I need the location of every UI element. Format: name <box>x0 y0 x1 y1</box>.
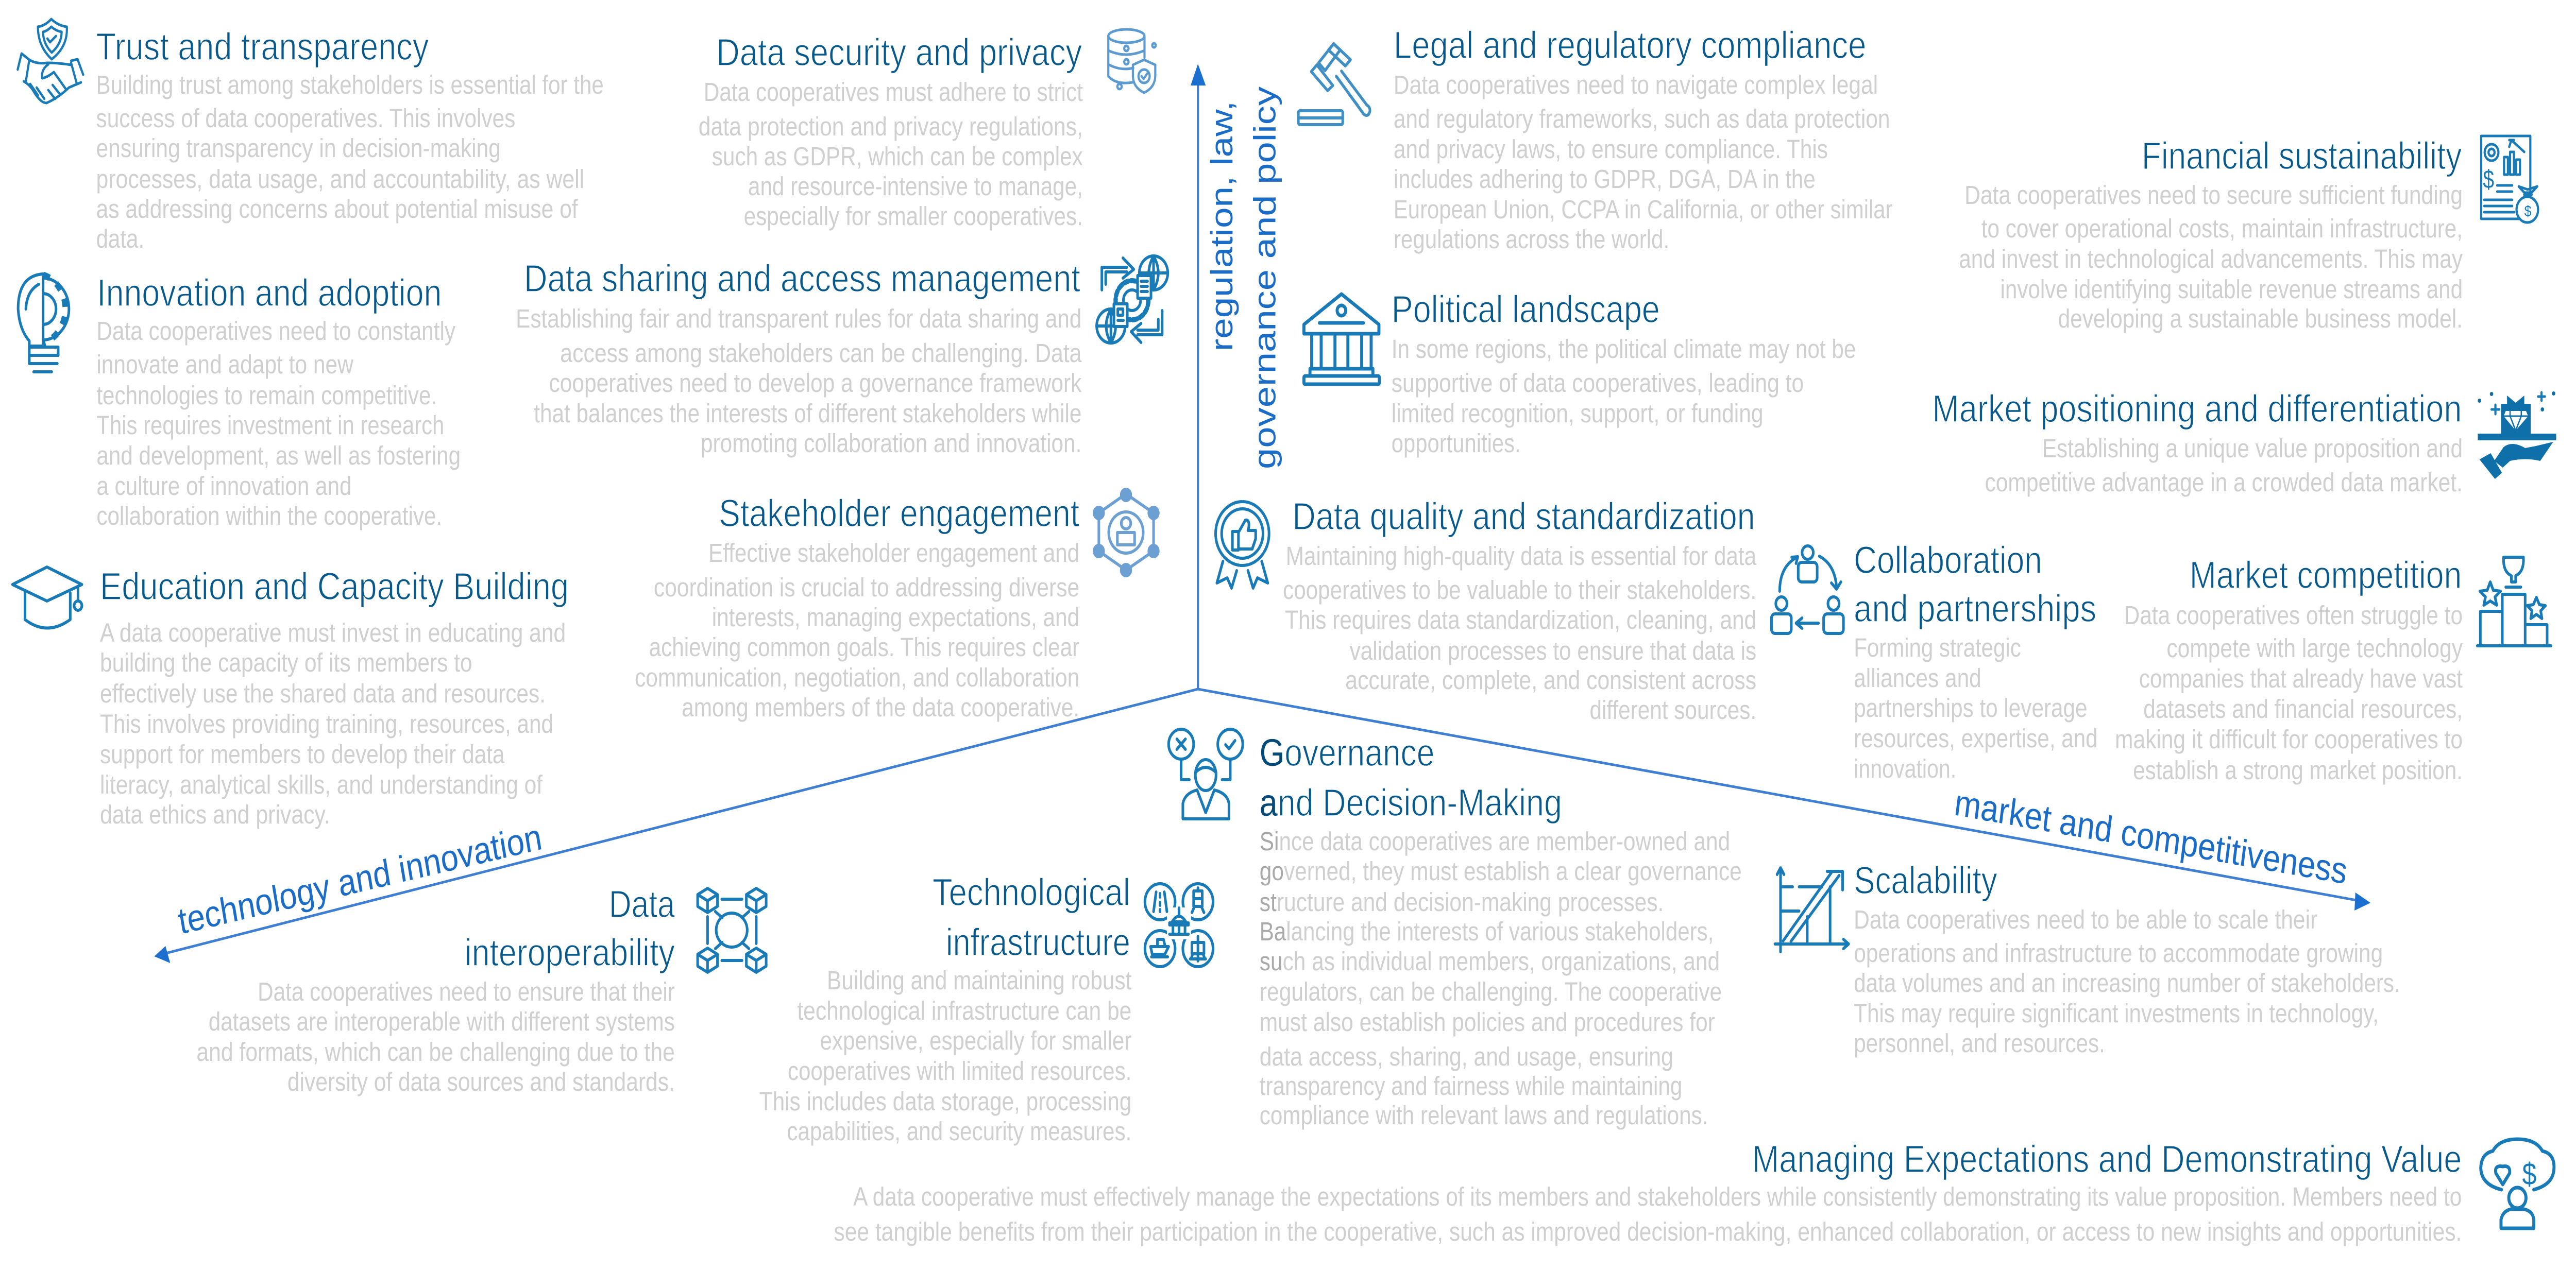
body text: governed, they must establish a clear governance <box>1260 856 1742 886</box>
body text: accurate, complete, and consistent across <box>1345 665 1756 695</box>
body text: This includes data storage, processing <box>759 1086 1131 1116</box>
body text: Building trust among stakeholders is essential for the <box>96 70 604 99</box>
body text: expensive, especially for smaller <box>820 1025 1131 1055</box>
body text: see tangible benefits from their participation in the cooperative, such as improved decision-making, enhanced collaboration, or access to new insights and opportunities. <box>834 1216 2462 1246</box>
body text: Balancing the interests of various stakeholders, <box>1260 916 1714 946</box>
body text: literacy, analytical skills, and understanding of <box>100 769 543 799</box>
body text: and regulatory frameworks, such as data protection <box>1394 104 1890 133</box>
body text: Data cooperatives need to constantly <box>96 316 456 346</box>
body text: must also establish policies and procedures for <box>1260 1007 1715 1037</box>
axis label: regulation, law, governance and policy: governance and policy <box>1248 86 1282 469</box>
body text: access among stakeholders can be challenging. Data <box>560 338 1082 368</box>
body text: support for members to develop their data <box>100 739 505 769</box>
body text: companies that already have vast <box>2139 663 2463 693</box>
body text <box>1959 180 2463 333</box>
icon: gavel <box>1298 44 1370 125</box>
body text <box>635 538 1079 722</box>
body text: Data cooperatives need to navigate complex legal <box>1394 70 1878 99</box>
body text: validation processes to ensure that data is <box>1350 636 1756 665</box>
icon: three people with circular arrows <box>1771 546 1843 633</box>
icon text: dollar sign: $ <box>2522 1157 2536 1191</box>
body text: achieving common goals. This requires clear <box>649 632 1079 662</box>
body text: This involves providing training, resources, and <box>100 709 553 739</box>
icon text: dollar signs: $ <box>2483 164 2494 194</box>
panel: education and capacity building <box>12 565 569 829</box>
body text: data ethics and privacy. <box>100 799 330 829</box>
body text: innovation. <box>1854 753 1956 783</box>
heading: Data <box>609 883 675 925</box>
body text: to cover operational costs, maintain infrastructure, <box>1981 213 2463 243</box>
body text: compete with large technology <box>2166 633 2463 663</box>
axis label: regulation, law, governance and policy: regulation, law, <box>1205 101 1240 351</box>
body text: A data cooperative must effectively manage the expectations of its members and stakeholders while consistently demonstrating its value proposition. Members need to <box>853 1181 2462 1211</box>
body text <box>516 303 1082 458</box>
body text: datasets are interoperable with different systems <box>209 1006 675 1036</box>
body text <box>100 617 566 829</box>
heading: Collaboration <box>1854 539 2042 581</box>
body text: This requires investment in research <box>96 410 444 440</box>
panel: scalability <box>1775 860 2400 1058</box>
icon: rising chart arrow <box>1775 868 1849 952</box>
body text: Establishing a unique value proposition and <box>2042 433 2463 463</box>
body text: processes, data usage, and accountability, as well <box>96 164 584 194</box>
body text <box>2115 600 2463 785</box>
heading: Technological <box>933 871 1130 914</box>
axes: three arrows from the centre <box>154 64 2370 963</box>
heading <box>933 871 1130 964</box>
body text: limited recognition, support, or funding <box>1392 398 1764 428</box>
panel: political landscape <box>1304 288 1856 458</box>
body text: competitive advantage in a crowded data market. <box>1985 467 2463 497</box>
body text: Forming strategic <box>1854 632 2021 662</box>
body text: cooperatives need to develop a governance framework <box>549 368 1082 398</box>
body text: data access, sharing, and usage, ensuring <box>1260 1041 1673 1071</box>
body text: Establishing fair and transparent rules for data sharing and <box>516 303 1081 333</box>
body text <box>1394 70 1892 254</box>
icon: database with shield <box>1108 29 1156 93</box>
body text: resources, expertise, and <box>1854 723 2098 753</box>
icon: four cubes around a circle <box>698 888 766 972</box>
body text: different sources. <box>1589 695 1756 725</box>
panel: data security and privacy <box>699 29 1156 231</box>
body text: regulators, can be challenging. The cooperative <box>1260 976 1722 1006</box>
body text: Data cooperatives need to ensure that their <box>258 976 675 1006</box>
arrow: market axis <box>1198 689 2370 911</box>
body text: making it difficult for cooperatives to <box>2115 724 2463 754</box>
body text: technologies to remain competitive. <box>96 380 437 410</box>
body text: Data cooperatives need to be able to scale their <box>1854 904 2317 934</box>
icon: decision maker with choices <box>1168 729 1243 819</box>
panel: data interoperability <box>196 883 766 1096</box>
icon: trophy on a podium <box>2477 557 2551 646</box>
body text <box>196 976 675 1096</box>
heading: Data sharing and access management <box>524 258 1080 300</box>
icon: government building <box>1304 294 1379 384</box>
body text: and invest in technological advancements. This may <box>1959 244 2463 273</box>
heading: Governance <box>1260 732 1434 774</box>
body text: such as individual members, organizations, and <box>1260 946 1720 976</box>
heading: Education and Capacity Building <box>100 565 569 608</box>
icon: hand offering a diamond on a tray <box>2478 391 2556 479</box>
body text: a culture of innovation and <box>96 471 352 501</box>
heading <box>1854 539 2096 630</box>
icon: network around a person <box>1094 489 1158 576</box>
icon: person with heart and dollar thought cloud <box>2481 1139 2554 1228</box>
body text: opportunities. <box>1392 428 1521 458</box>
heading: Market competition <box>2190 554 2462 596</box>
panel: legal and regulatory compliance <box>1298 24 1892 254</box>
panel: collaboration and partnerships <box>1771 539 2098 783</box>
panel: financial sustainability <box>1959 135 2538 333</box>
icon: transport infrastructure around a building <box>1145 884 1213 967</box>
heading: Stakeholder engagement <box>719 492 1079 535</box>
body text: interests, managing expectations, and <box>712 602 1079 632</box>
body text: and formats, which can be challenging due to the <box>196 1037 675 1067</box>
axis label: technology and innovation: technology and innovation <box>175 816 545 942</box>
body text: innovate and adapt to new <box>96 349 354 379</box>
body text: data protection and privacy regulations, <box>699 111 1083 141</box>
arrow: technology axis <box>154 689 1198 963</box>
panel: innovation and adoption <box>18 272 461 530</box>
body text: communication, negotiation, and collaboration <box>635 662 1079 692</box>
body text: involve identifying suitable revenue streams and <box>2001 274 2463 304</box>
body text: technological infrastructure can be <box>797 996 1131 1025</box>
panel: managing expectations and demonstrating value <box>834 1138 2554 1246</box>
icon: rosette with thumbs up <box>1215 502 1269 588</box>
heading: Data security and privacy <box>716 31 1082 74</box>
body text: and development, as well as fostering <box>96 440 461 470</box>
body text <box>699 77 1083 231</box>
body text: and privacy laws, to ensure compliance. This <box>1394 134 1828 164</box>
icon: graduation cap <box>12 567 82 628</box>
body text <box>1392 334 1856 458</box>
body text: ensuring transparency in decision-making <box>96 133 501 163</box>
axis label: regulation, law, governance and policy <box>1205 86 1282 469</box>
body text: that balances the interests of different stakeholders while <box>534 398 1081 428</box>
body text: Effective stakeholder engagement and <box>708 538 1079 568</box>
body text: compliance with relevant laws and regulations. <box>1260 1100 1708 1130</box>
body text: European Union, CCPA in California, or other similar <box>1394 194 1892 224</box>
body text: capabilities, and security measures. <box>787 1116 1131 1146</box>
heading: Innovation and adoption <box>97 272 442 314</box>
body text: includes adhering to GDPR, DGA, DA in the <box>1394 164 1816 194</box>
arrow: regulation axis <box>1191 64 1206 689</box>
heading: Data quality and standardization <box>1292 495 1755 538</box>
body text: such as GDPR, which can be complex <box>712 141 1083 171</box>
heading: Scalability <box>1854 860 1997 902</box>
heading: and partnerships <box>1854 588 2096 630</box>
axis label: market and competitiveness: market and competitiveness <box>1952 782 2349 892</box>
body text: alliances and <box>1854 663 1981 693</box>
body text: success of data cooperatives. This involves <box>96 103 515 133</box>
body text: coordination is crucial to addressing diverse <box>654 572 1079 602</box>
body text <box>1283 541 1757 725</box>
body text: This may require significant investments in technology, <box>1854 998 2379 1028</box>
heading: Managing Expectations and Demonstrating Value <box>1752 1138 2462 1180</box>
body text: building the capacity of its members to <box>100 647 472 677</box>
icon text: dollar signs: $ <box>2524 202 2532 220</box>
panel: stakeholder engagement <box>635 489 1158 722</box>
icon text: dollar signs <box>2483 164 2532 220</box>
body text: data. <box>96 224 144 253</box>
body text: cooperatives to be valuable to their stakeholders. <box>1283 575 1756 605</box>
body text <box>96 316 461 530</box>
heading: Market positioning and differentiation <box>1932 388 2462 430</box>
body text: regulations across the world. <box>1394 224 1669 254</box>
body text: cooperatives with limited resources. <box>788 1056 1131 1086</box>
body text <box>1854 904 2400 1058</box>
heading: infrastructure <box>946 921 1130 964</box>
body text: Data cooperatives need to secure sufficient funding <box>1964 180 2463 210</box>
heading <box>1260 732 1562 824</box>
icon: globes, gear and exchange arrows <box>1097 256 1168 343</box>
body text <box>834 1181 2462 1246</box>
body text <box>96 70 604 253</box>
body text: promoting collaboration and innovation. <box>701 428 1081 458</box>
body text: Data cooperatives often struggle to <box>2124 600 2463 630</box>
body text <box>1260 826 1742 1130</box>
heading: Legal and regulatory compliance <box>1394 24 1866 66</box>
body text: This requires data standardization, cleaning, and <box>1285 605 1756 634</box>
icon: handshake with shield <box>18 19 83 103</box>
heading: interoperability <box>465 932 675 974</box>
body text: structure and decision-making processes. <box>1260 887 1664 917</box>
body text: and resource-intensive to manage, <box>748 171 1083 201</box>
body text: developing a sustainable business model. <box>2058 303 2463 333</box>
body text: data volumes and an increasing number of stakeholders. <box>1854 968 2400 998</box>
body text <box>759 965 1131 1146</box>
body text: personnel, and resources. <box>1854 1028 2105 1058</box>
icon: light bulb with gear <box>18 274 69 372</box>
body text: supportive of data cooperatives, leading to <box>1392 368 1804 398</box>
icon: financial report with money bag <box>2481 136 2538 222</box>
heading: Political landscape <box>1392 288 1660 331</box>
panel: market competition <box>2115 554 2551 785</box>
body text: A data cooperative must invest in educating and <box>100 617 566 647</box>
body text: Data cooperatives must adhere to strict <box>704 77 1083 107</box>
body text: collaboration within the cooperative. <box>96 501 442 530</box>
panel: technological infrastructure <box>759 871 1213 1146</box>
body text: In some regions, the political climate may not be <box>1392 334 1856 364</box>
body text <box>1854 632 2098 783</box>
body text: especially for smaller cooperatives. <box>744 201 1083 231</box>
panel: data sharing and access management <box>516 256 1168 458</box>
body text: partnerships to leverage <box>1854 693 2088 723</box>
heading <box>465 883 675 974</box>
body text: datasets and financial resources, <box>2143 694 2463 724</box>
body text: operations and infrastructure to accommodate growing <box>1854 938 2383 968</box>
body text: Maintaining high-quality data is essential for data <box>1286 541 1757 571</box>
body text: Building and maintaining robust <box>827 965 1131 995</box>
body text: effectively use the shared data and resources. <box>100 678 546 708</box>
panel: data quality and standardization <box>1215 495 1757 725</box>
body text: establish a strong market position. <box>2133 755 2463 785</box>
body text: diversity of data sources and standards. <box>287 1067 675 1096</box>
body text: transparency and fairness while maintaining <box>1260 1071 1682 1101</box>
panel: governance and decision-making <box>1168 729 1742 1130</box>
panel: trust and transparency <box>18 19 604 253</box>
body text <box>1985 433 2463 497</box>
heading: Trust and transparency <box>96 26 429 68</box>
heading: and Decision-Making <box>1260 782 1562 824</box>
body text: Since data cooperatives are member-owned and <box>1260 826 1730 856</box>
body text: among members of the data cooperative. <box>682 692 1079 722</box>
panel: market positioning and differentiation <box>1932 388 2556 497</box>
body text: as addressing concerns about potential misuse of <box>96 194 578 224</box>
heading: Financial sustainability <box>2142 135 2462 177</box>
